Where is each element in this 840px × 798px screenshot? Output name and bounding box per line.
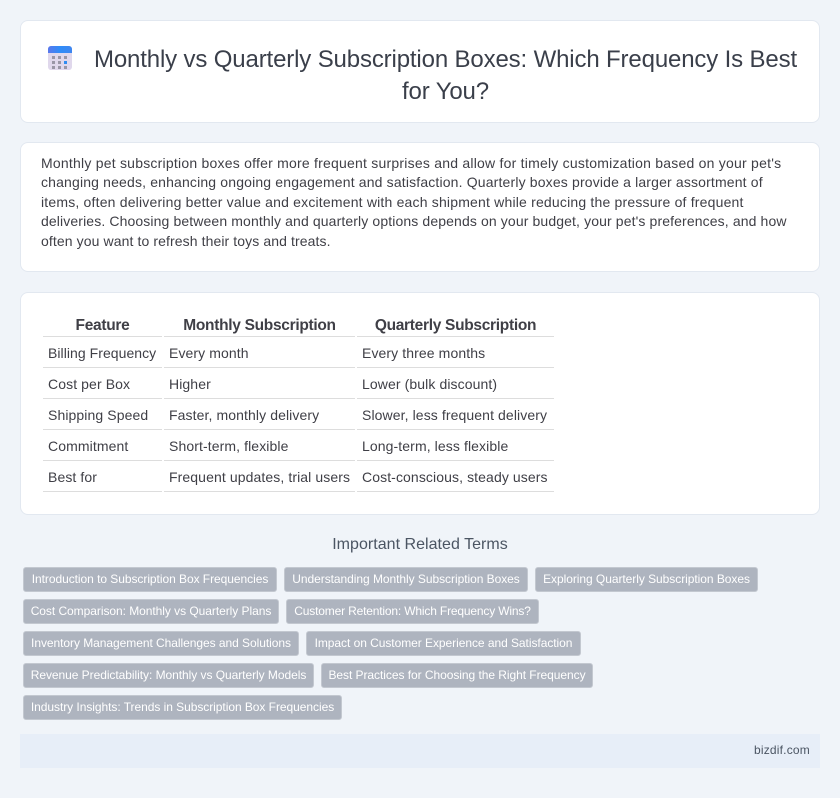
related terms tags: [23, 567, 758, 720]
row: commitment: Short-term, flexible: [169, 438, 288, 454]
row: best for: [48, 469, 548, 485]
panel: comparison table: [20, 292, 820, 515]
tag: Impact on Customer Experience and Satisfaction: [315, 636, 572, 650]
row: commitment: Commitment: [48, 438, 128, 454]
table header: [76, 317, 536, 334]
row: shipping speed: Slower, less frequent delivery: [362, 407, 547, 423]
heading: related terms: Important Related Terms: [332, 536, 508, 553]
table header: Quarterly Subscription: [375, 317, 536, 334]
row: best for: Frequent updates, trial users: [169, 469, 350, 485]
tag: Understanding Monthly Subscription Boxes: [292, 572, 520, 586]
row: cost per box: Higher: [169, 376, 211, 392]
row: best for: Cost-conscious, steady users: [362, 469, 548, 485]
tag: [321, 663, 593, 688]
tag: [23, 695, 342, 720]
panel: intro text: [20, 142, 820, 272]
text block: intro: Monthly pet subscription boxes offer more frequent surprises and allow for timely customization based on your pet's: [41, 155, 781, 171]
row: billing frequency: Every three months: [362, 345, 485, 361]
tag: Inventory Management Challenges and Solutions: [31, 636, 291, 650]
row: shipping speed: Faster, monthly delivery: [169, 407, 319, 423]
title: for You?: [402, 78, 489, 105]
tag: [23, 663, 314, 688]
footer bar: [20, 734, 820, 768]
text block: intro: items, often delivering better value and excitement with each shipment while reducing the pressure of frequent: [41, 194, 744, 210]
tag: Revenue Predictability: Monthly vs Quarterly Models: [31, 668, 306, 682]
row: cost per box: Lower (bulk discount): [362, 376, 497, 392]
header panel: [20, 20, 820, 123]
tag: [535, 567, 758, 592]
row: cost per box: [48, 376, 497, 392]
title: Monthly vs Quarterly Subscription Boxes: Which Frequency Is Best: [94, 46, 797, 73]
tag: Introduction to Subscription Box Frequencies: [32, 572, 268, 586]
tag: Cost Comparison: Monthly vs Quarterly Plans: [31, 604, 271, 618]
comparison table: [43, 317, 554, 492]
table header: Feature: [76, 317, 129, 334]
table header: Monthly Subscription: [183, 317, 336, 334]
tag: Industry Insights: Trends in Subscription Box Frequencies: [31, 700, 334, 714]
row: cost per box: Cost per Box: [48, 376, 130, 392]
tag: [23, 631, 299, 656]
icon: calendar: [48, 46, 72, 70]
tag: Exploring Quarterly Subscription Boxes: [543, 572, 750, 586]
text block: intro: often you want to refresh their toys and treats.: [41, 233, 331, 249]
tag: [286, 599, 539, 624]
row: commitment: [48, 438, 508, 454]
row: billing frequency: Billing Frequency: [48, 345, 156, 361]
tag: [306, 631, 581, 656]
text block: intro: deliveries. Choosing between monthly and quarterly options depends on your budget, your pet's preferences, and how: [41, 213, 787, 229]
tag: Best Practices for Choosing the Right Frequency: [328, 668, 586, 682]
text block: intro: [41, 155, 787, 249]
row: shipping speed: [48, 407, 547, 423]
tag: [23, 599, 279, 624]
text block: intro: changing needs, enhancing ongoing engagement and satisfaction. Quarterly boxes provide a larger assortment of: [41, 174, 763, 190]
row: billing frequency: [48, 345, 485, 361]
row: billing frequency: Every month: [169, 345, 249, 361]
row: commitment: Long-term, less flexible: [362, 438, 508, 454]
title: [94, 46, 797, 105]
row: shipping speed: Shipping Speed: [48, 407, 148, 423]
tag: [23, 567, 277, 592]
tag: Customer Retention: Which Frequency Wins?: [294, 604, 531, 618]
row: best for: Best for: [48, 469, 97, 485]
tag: [284, 567, 528, 592]
footer credit: bizdif.com: [754, 743, 810, 757]
